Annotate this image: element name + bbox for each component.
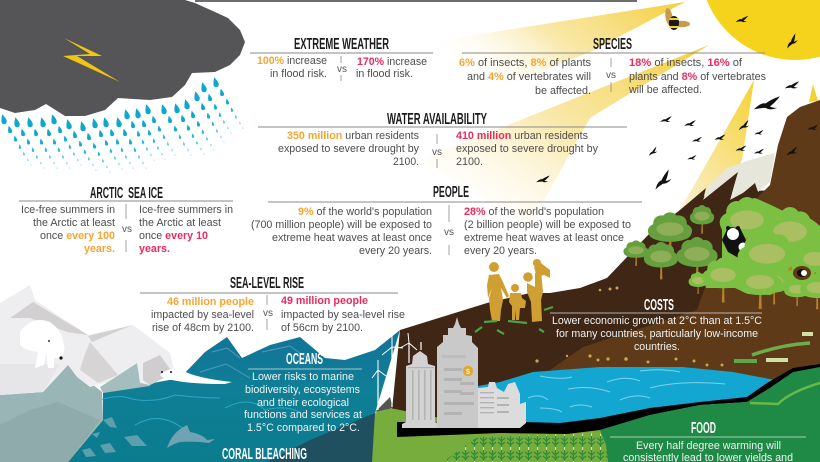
snow cap — [703, 153, 775, 200]
body text: and their ecological — [257, 397, 349, 409]
right text: 2100. — [456, 156, 483, 168]
right text: plants and 8% of vertebrates — [629, 71, 766, 83]
panel: oceans — [244, 351, 362, 434]
people silhouettes — [487, 259, 550, 322]
panel: extreme weather — [250, 36, 433, 81]
iceberg — [0, 285, 175, 395]
dark green land — [500, 367, 820, 462]
right text: in flood risk. — [356, 68, 413, 80]
left text: rise of 48cm by 2100. — [152, 322, 254, 334]
left text: impacted by sea-level — [151, 309, 254, 321]
rain — [1, 77, 244, 173]
centre tower — [437, 317, 478, 428]
panda in tree — [722, 226, 752, 260]
body text: 1.5°C compared to 2°C. — [247, 422, 360, 434]
fish — [82, 417, 147, 457]
body text: biodiversity, ecosystems — [245, 384, 360, 396]
right text — [464, 206, 631, 257]
panel: people — [251, 184, 642, 257]
woman — [487, 262, 509, 321]
left text: 2100. — [393, 156, 419, 168]
right text: 170% increase — [357, 56, 427, 68]
child — [509, 284, 526, 320]
man with raised child — [523, 259, 550, 322]
vs marker: vs — [263, 308, 273, 319]
mountain and lighter brown slope — [550, 100, 820, 400]
left text — [251, 206, 432, 257]
left text: the Arctic at least — [33, 217, 115, 229]
right text: the Arctic at least — [139, 217, 221, 229]
left text — [278, 130, 419, 168]
city skyline — [372, 317, 527, 428]
body text: for many countries, particularly low-income — [556, 328, 758, 340]
right text: (2 billion people) will be exposed to — [464, 219, 631, 231]
lake — [478, 367, 775, 425]
forest — [623, 197, 820, 309]
coin: $ — [466, 369, 470, 376]
panel: sea-level rise — [140, 275, 405, 334]
right text: years. — [139, 243, 170, 255]
left text: once every 100 — [40, 230, 115, 242]
grass strip on green — [750, 383, 820, 404]
right text — [281, 295, 405, 334]
right text — [356, 56, 427, 80]
dark water — [267, 413, 375, 462]
right text: impacted by sea-level rise — [281, 309, 405, 321]
vs marker: vs — [432, 147, 442, 158]
heading: FOOD — [691, 420, 716, 437]
left text: 6% of insects, 8% of plants — [459, 57, 591, 69]
corn field — [443, 433, 608, 462]
left text: exposed to severe drought by — [278, 143, 419, 155]
vs marker: vs — [606, 70, 616, 81]
panel: costs — [550, 297, 762, 353]
icon: lightning bolt — [63, 38, 120, 82]
vs marker: vs — [122, 224, 132, 235]
right text: will be affected. — [628, 84, 702, 96]
coin — [463, 366, 473, 376]
body text: countries. — [634, 341, 680, 353]
right text — [139, 204, 233, 255]
vs marker — [263, 295, 273, 330]
heading: ARCTIC SEA ICE — [90, 185, 163, 202]
left text: 9% of the world's population — [298, 206, 432, 218]
right text: 18% of insects, 16% of — [629, 57, 743, 69]
left building — [402, 351, 440, 428]
vs marker — [432, 134, 442, 168]
top frame and rule — [18, 0, 637, 3]
left text: 100% increase — [257, 55, 327, 67]
heading: EXTREME WEATHER — [294, 36, 389, 53]
heading: SPECIES — [593, 36, 632, 53]
left text: be affected. — [535, 85, 591, 97]
vs marker: vs — [444, 227, 454, 238]
low right buildings — [478, 382, 526, 428]
left text: Ice-free summers in — [21, 204, 115, 216]
vs marker — [337, 56, 347, 81]
body text: functions and services at — [244, 409, 362, 421]
right text: once every 10 — [139, 230, 208, 242]
body text: Every half degree warming will — [636, 440, 781, 452]
right text — [456, 130, 598, 168]
dark rock peaks — [680, 172, 758, 222]
left text: 46 million people — [167, 296, 254, 308]
sun — [700, 0, 820, 60]
dark brown ground — [390, 190, 820, 430]
right text: Ice-free summers in — [139, 204, 233, 216]
grass and pebbles on ground — [475, 286, 813, 366]
light green land — [370, 409, 608, 462]
body text: Lower risks to marine — [252, 371, 354, 383]
vs marker — [606, 58, 616, 92]
right text: every 20 years. — [464, 245, 537, 257]
iceberg underwater — [0, 363, 150, 462]
birds — [536, 16, 818, 190]
polar bear standing — [20, 320, 64, 368]
ocean — [68, 330, 400, 462]
vs marker: vs — [337, 64, 347, 75]
small panda — [793, 266, 811, 280]
sun rays — [420, 2, 818, 225]
right text: exposed to severe drought by — [456, 143, 598, 155]
panel: water availability — [258, 111, 627, 168]
right text: 28% of the world's population — [464, 206, 604, 218]
black base — [397, 422, 527, 428]
heading: PEOPLE — [433, 184, 469, 201]
green canopy mass — [705, 198, 820, 296]
vs marker — [444, 205, 454, 255]
body text: Lower economic growth at 2°C than at 1.5°C — [552, 315, 762, 327]
panel: food — [610, 420, 806, 462]
body text — [623, 440, 793, 462]
left text: every 20 years. — [359, 245, 432, 257]
black shoreline — [397, 364, 820, 437]
heading: WATER AVAILABILITY — [387, 111, 487, 128]
heading: SEA-LEVEL RISE — [230, 275, 304, 292]
right text: 410 million urban residents — [456, 130, 588, 142]
wind turbines — [372, 333, 421, 410]
left text — [459, 57, 591, 97]
panel: arctic sea ice — [19, 185, 233, 255]
left text: 350 million urban residents — [287, 130, 419, 142]
left text: in flood risk. — [270, 68, 327, 80]
icon: bee — [664, 8, 690, 30]
heading: OCEANS — [286, 351, 323, 368]
right text: extreme heat waves at least once — [464, 232, 624, 244]
body text — [244, 371, 362, 434]
dolphin — [167, 425, 215, 448]
heading: COSTS — [644, 297, 674, 314]
right text: 49 million people — [281, 295, 368, 307]
vs marker — [122, 204, 132, 252]
storm cloud — [0, 0, 245, 116]
left text — [257, 55, 327, 80]
left text — [21, 204, 115, 255]
right text — [628, 57, 766, 96]
right text: of 56cm by 2100. — [281, 322, 363, 334]
polar bear swimming — [160, 369, 232, 384]
panel: species — [459, 36, 766, 97]
body text — [552, 315, 762, 353]
left text: years. — [84, 243, 115, 255]
left text: and 4% of vertebrates will — [467, 71, 591, 83]
left text: extreme heat waves at least once — [272, 232, 432, 244]
left text — [151, 296, 254, 334]
left text: (700 million people) will be exposed to — [251, 219, 432, 231]
